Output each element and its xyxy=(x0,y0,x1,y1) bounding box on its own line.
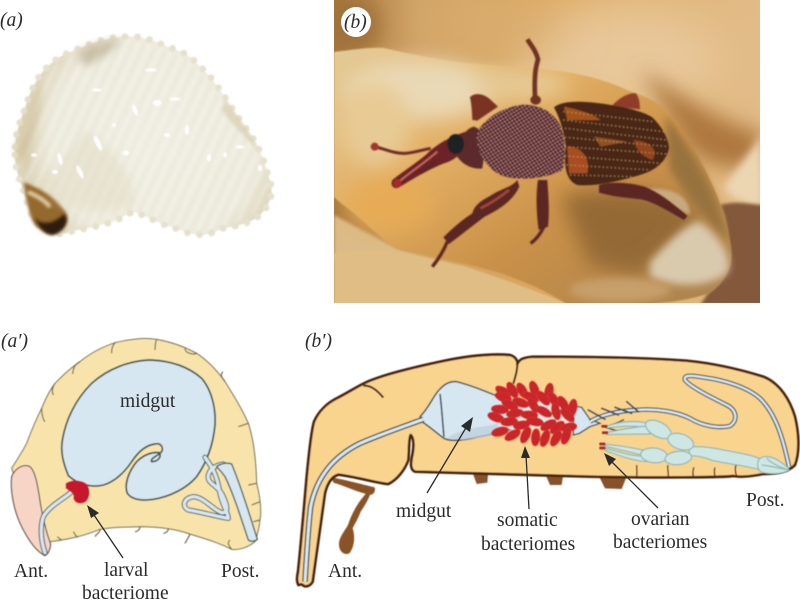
adult body xyxy=(297,355,798,586)
label: larval bacteriome xyxy=(82,560,169,604)
label: ovarian bacteriomes xyxy=(613,509,707,553)
ovarioles xyxy=(643,416,674,442)
larva head xyxy=(24,182,67,234)
label: b′ Ant.: Ant. xyxy=(328,561,362,582)
larva body xyxy=(12,339,261,555)
diagram: larva cross-section (a′) xyxy=(11,339,261,556)
left antenna xyxy=(374,147,431,153)
body fold lines xyxy=(363,364,517,398)
gut bulb xyxy=(420,382,523,440)
label: larval bacteriome: bacteriome xyxy=(82,583,169,604)
snout xyxy=(392,132,466,188)
top antenna xyxy=(527,39,538,97)
thorax xyxy=(477,105,565,179)
arrow: larval bacteriome xyxy=(87,505,123,558)
arrow: ovarian bacteriomes xyxy=(604,453,658,508)
weevil legs xyxy=(443,180,687,244)
body segment notches xyxy=(42,339,260,549)
label: somatic bacteriomes: bacteriomes xyxy=(481,534,575,555)
terminal chamber xyxy=(758,457,789,474)
larval bacteriome xyxy=(66,481,89,504)
anterior gut xyxy=(41,492,72,553)
lower grain xyxy=(334,252,565,303)
gut side spikes xyxy=(588,402,638,432)
panel label: (a′): (a′) xyxy=(1,331,28,352)
label: ovarian bacteriomes: bacteriomes xyxy=(613,532,707,553)
label: a′ midgut: midgut xyxy=(120,391,176,412)
midgut xyxy=(62,360,215,500)
hindgut loop xyxy=(184,457,228,518)
photo: weevil larva xyxy=(15,36,272,235)
far legs xyxy=(470,94,498,121)
hindgut tube xyxy=(590,376,789,467)
panel label: (b) badge xyxy=(341,7,371,37)
photo background xyxy=(334,0,760,303)
hindgut taper xyxy=(573,406,600,435)
foregut tube xyxy=(305,419,423,582)
weevil xyxy=(371,39,687,267)
label: larval bacteriome: larval xyxy=(104,560,149,581)
label: a′ Ant.: Ant. xyxy=(14,561,48,582)
larva shading xyxy=(42,130,134,211)
grain highlights and shadow xyxy=(345,60,495,120)
hindgut taper xyxy=(217,463,257,541)
label: somatic bacteriomes xyxy=(481,510,575,555)
main grain xyxy=(334,48,732,304)
label: somatic bacteriomes: somatic xyxy=(497,510,558,531)
oviduct strands xyxy=(607,422,648,428)
photo: adult weevil on a wheat grain xyxy=(320,0,765,305)
label: b′ midgut: midgut xyxy=(396,501,452,522)
elytra xyxy=(554,102,669,185)
arrow: midgut xyxy=(427,417,473,493)
panel label: (a): (a) xyxy=(0,10,23,31)
label: a′ Post.: Post. xyxy=(221,561,259,582)
ovaries xyxy=(605,416,789,474)
larva highlights xyxy=(31,68,262,179)
larva texture xyxy=(18,40,268,230)
head capsule xyxy=(11,466,51,556)
label: ovarian bacteriomes: ovarian xyxy=(631,509,690,530)
head xyxy=(457,127,487,169)
somatic bacteriomes cluster xyxy=(486,380,578,448)
abdominal notches xyxy=(637,463,737,477)
panel label: (b) badge: (b) xyxy=(344,12,367,33)
feet xyxy=(472,470,627,489)
arrow: somatic bacteriomes xyxy=(521,446,530,509)
ovarian bacteriome tips xyxy=(599,425,608,449)
common oviduct xyxy=(688,447,760,469)
antenna xyxy=(332,477,375,554)
diagram: adult weevil cross-section (b′) xyxy=(297,355,798,586)
panel label: (b′): (b′) xyxy=(305,331,332,352)
label: b′ Post.: Post. xyxy=(746,490,784,511)
